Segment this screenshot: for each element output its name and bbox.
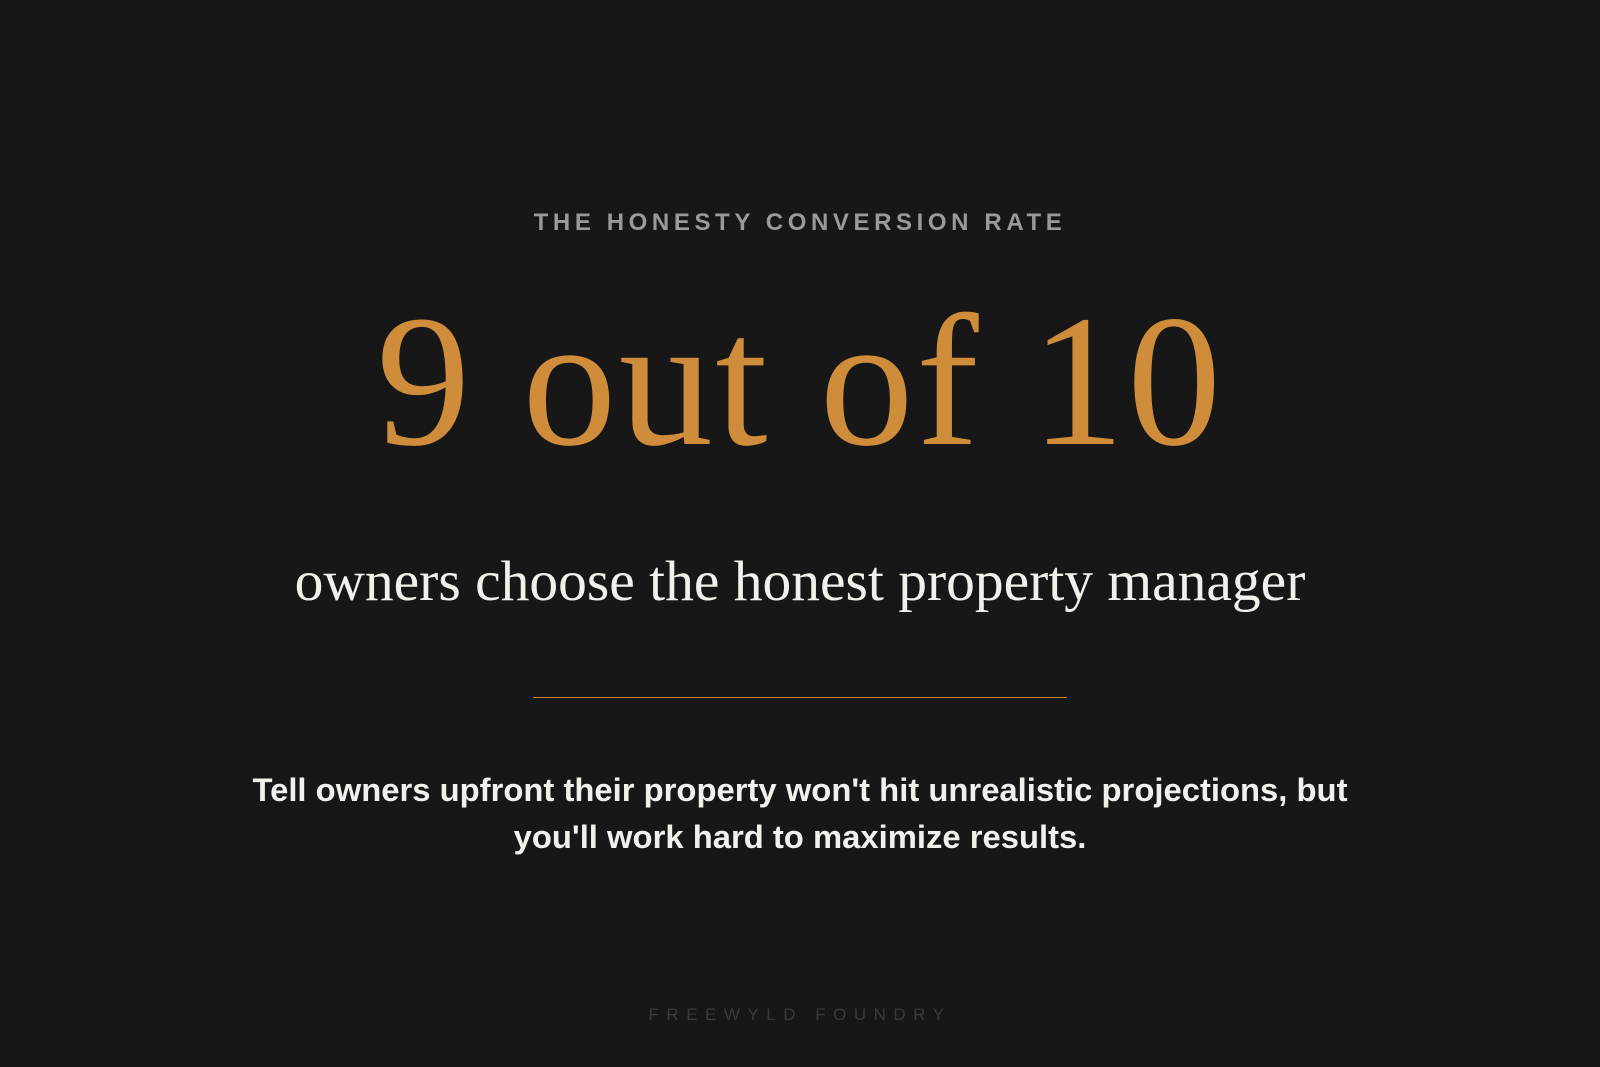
headline stat: 9 out of 10 <box>376 276 1224 485</box>
eyebrow heading: THE HONESTY CONVERSION RATE <box>534 209 1066 236</box>
divider line <box>533 697 1067 698</box>
subheading: owners choose the honest property manager <box>295 550 1305 613</box>
footer brand: FREEWYLD FOUNDRY <box>649 1005 951 1024</box>
body text <box>252 771 1348 855</box>
body text: Tell owners upfront their property won't hit unrealistic projections, but <box>252 771 1348 808</box>
body text: you'll work hard to maximize results. <box>514 818 1086 855</box>
